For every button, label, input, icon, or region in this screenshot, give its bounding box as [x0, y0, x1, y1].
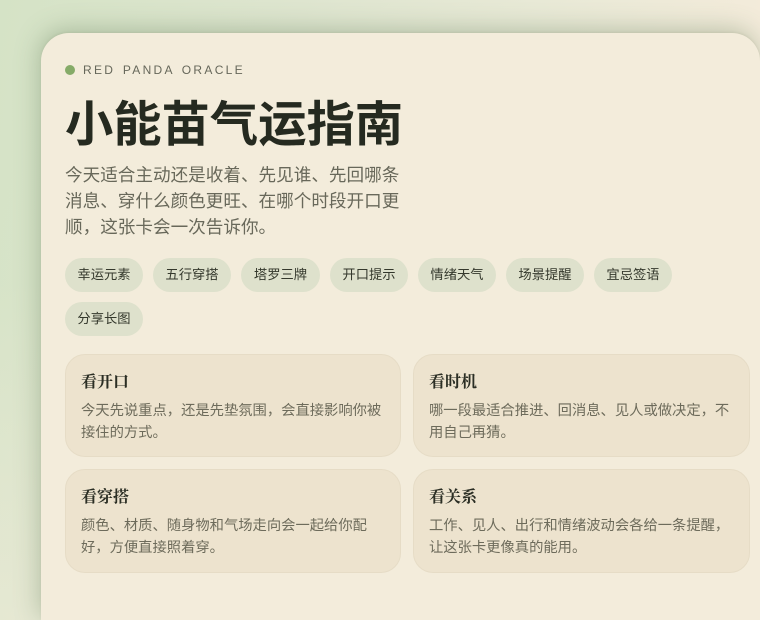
icon: green dot — [65, 65, 75, 75]
chip: 情绪天气: 情绪天气 — [430, 267, 484, 282]
chip: 情绪天气 — [418, 258, 496, 292]
body text — [81, 402, 381, 441]
chip: 幸运元素 — [65, 258, 143, 292]
body text: 哪一段最适合推进、回消息、见人或做决定，不 — [429, 403, 729, 419]
panel: 看关系 — [413, 469, 750, 573]
chip: 塔罗三牌: 塔罗三牌 — [254, 267, 307, 282]
body text — [429, 518, 729, 556]
eyebrow text: RED PANDA ORACLE — [83, 63, 245, 77]
feature chips — [65, 258, 672, 336]
eyebrow label — [65, 63, 245, 77]
chip: 分享长图: 分享长图 — [77, 311, 131, 326]
chip: 宜忌签语 — [594, 258, 672, 292]
title: 小能苗气运指南 — [65, 98, 403, 152]
chip: 幸运元素: 幸运元素 — [77, 267, 131, 282]
chip: 分享长图 — [65, 302, 143, 336]
intro text: 今天适合主动还是收着、先见谁、先回哪条 — [65, 164, 399, 184]
panel: 看开口 — [65, 354, 401, 457]
intro text: 顺，这张卡会一次告诉你。 — [65, 216, 276, 236]
chip: 塔罗三牌 — [241, 258, 320, 292]
panel: 看穿搭 — [65, 469, 401, 573]
intro text — [65, 164, 399, 236]
body text: 接住的方式。 — [81, 425, 167, 441]
chip: 五行穿搭 — [153, 258, 231, 292]
chip: 宜忌签语: 宜忌签语 — [606, 267, 660, 282]
body text: 工作、见人、出行和情绪波动会各给一条提醒， — [429, 518, 729, 534]
heading: 看时机 — [429, 374, 477, 391]
heading: 看关系 — [429, 489, 477, 506]
chip: 开口提示 — [330, 258, 408, 292]
body text — [81, 518, 367, 556]
body text: 今天先说重点，还是先垫氛围，会直接影响你被 — [81, 403, 381, 419]
heading: 看开口 — [81, 374, 129, 391]
body text — [429, 402, 729, 441]
intro text: 消息、穿什么颜色更旺、在哪个时段开口更 — [65, 190, 399, 210]
chip: 开口提示: 开口提示 — [342, 267, 396, 282]
body text: 颜色、材质、随身物和气场走向会一起给你配 — [81, 518, 367, 534]
heading: 看穿搭 — [81, 489, 129, 506]
body text: 用自己再猜。 — [429, 425, 515, 441]
chip: 场景提醒: 场景提醒 — [518, 267, 572, 282]
chip: 场景提醒 — [506, 258, 584, 292]
body text: 好，方便直接照着穿。 — [81, 540, 224, 556]
chip: 五行穿搭: 五行穿搭 — [165, 267, 219, 282]
body text: 让这张卡更像真的能用。 — [429, 540, 586, 556]
panel: 看时机 — [413, 354, 750, 457]
